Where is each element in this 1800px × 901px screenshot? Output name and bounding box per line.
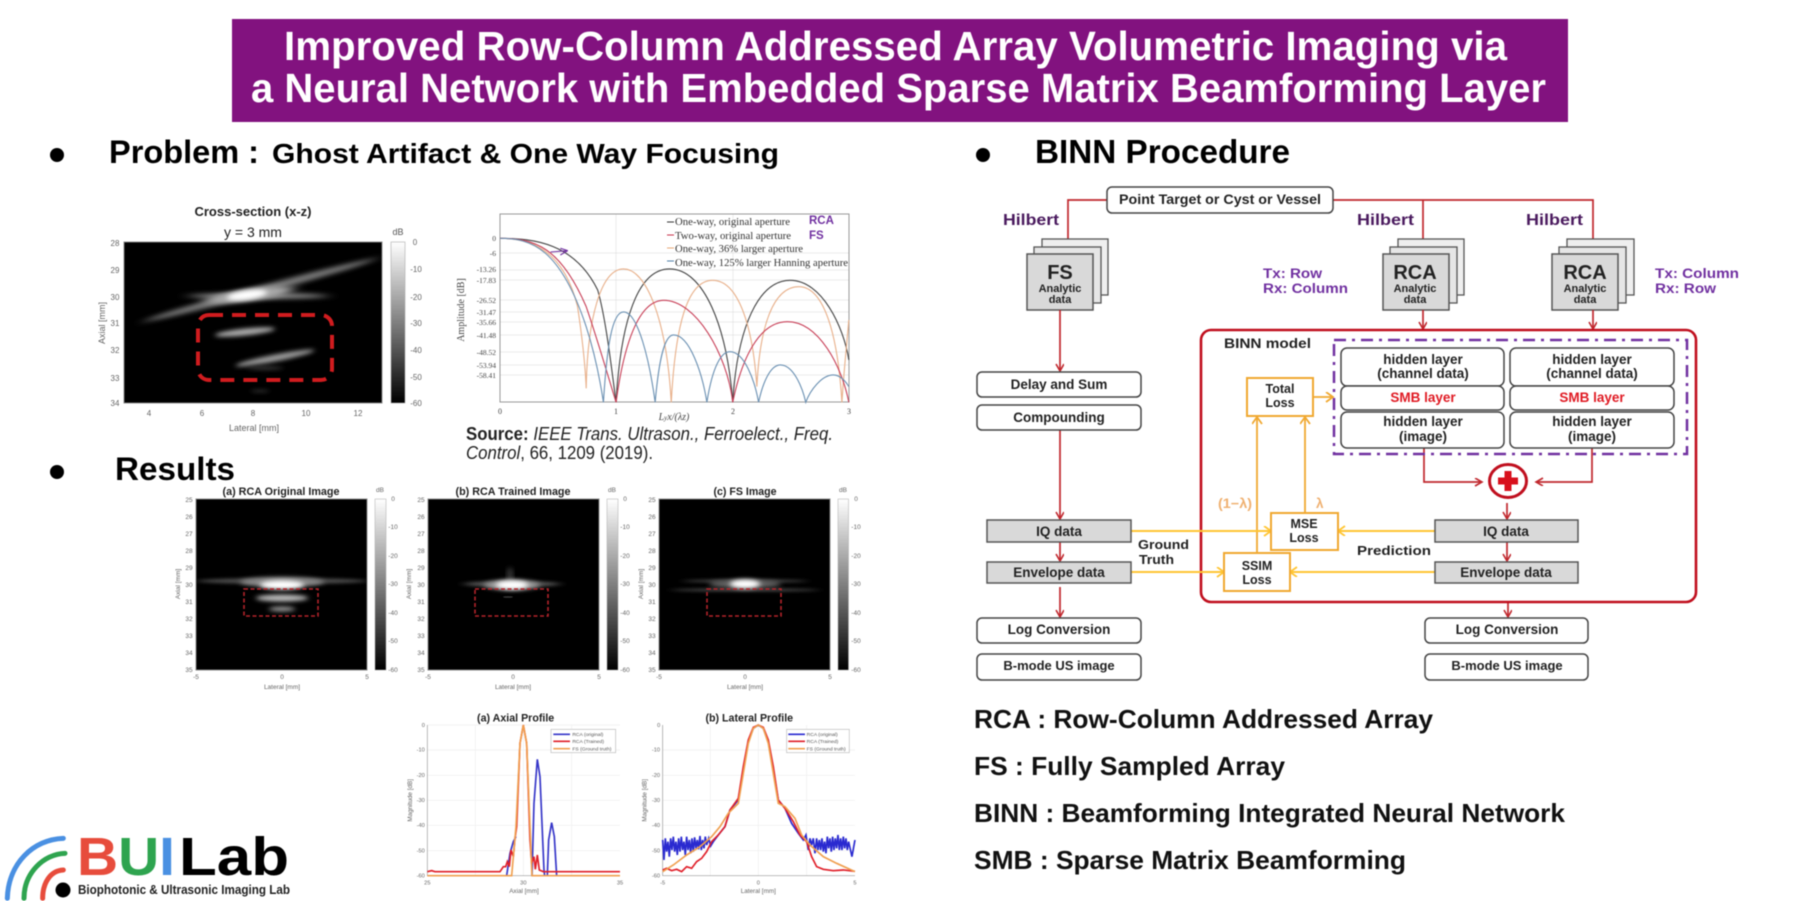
title banner: Improved Row-Column Addressed Array Volumetric Imaging via <box>284 23 1508 69</box>
flow: red connector arrows <box>1060 310 1593 617</box>
result image a: RCA original: 29 <box>185 565 193 572</box>
labels: Tx/Rx right: Tx: Column <box>1655 266 1739 281</box>
result image a: RCA original: dB <box>376 487 384 494</box>
amplitude plot: -6 <box>490 249 496 258</box>
heading: problem <box>50 134 779 170</box>
stack: RCA analytic data 1: data <box>1404 294 1427 306</box>
chart: axial profile: -50 <box>417 848 425 854</box>
heading: problem: Problem : <box>109 134 259 170</box>
labels: Tx/Rx right <box>1655 266 1739 296</box>
stack: FS analytic data: FS <box>1047 262 1073 284</box>
labels: Tx/Rx right: Rx: Row <box>1655 281 1717 296</box>
flow: RCA pipeline boxes: B-mode US image <box>1451 658 1563 673</box>
result image a: RCA original: Lateral [mm] <box>264 684 300 691</box>
result image b: RCA trained: 33 <box>417 633 425 640</box>
chart: lateral profile: -5 <box>660 881 665 887</box>
chart: lateral profile: -50 <box>652 848 660 854</box>
result image a: RCA original: 28 <box>185 548 193 555</box>
result image c: FS: 0 <box>743 674 747 681</box>
amplitude plot: -13.26 <box>477 265 496 274</box>
result image a: RCA original: 30 <box>185 582 193 589</box>
label: ground truth: Ground <box>1138 537 1189 552</box>
chart: lateral profile <box>642 712 857 895</box>
cross-section ultrasound image: 12 <box>354 409 363 418</box>
heading: BINN procedure: BINN Procedure <box>1035 133 1290 170</box>
heading: problem: Ghost Artifact & One Way Focusing <box>272 138 779 169</box>
amplitude plot: 0 <box>498 407 502 416</box>
stack: FS analytic data <box>1027 239 1108 310</box>
chart: axial profile: RCA (original) <box>572 732 604 738</box>
chart: axial profile: -30 <box>417 798 425 804</box>
cross-section ultrasound image: y = 3 mm <box>224 224 282 240</box>
cross-section ultrasound image <box>97 204 422 433</box>
labels: loss weights: λ <box>1316 496 1324 511</box>
result image a: RCA original: 26 <box>185 514 193 521</box>
amplitude plot: -53.94 <box>477 361 496 370</box>
result image a: RCA original: -60 <box>388 667 398 674</box>
box: SSIM loss: Loss <box>1242 573 1272 587</box>
result image c: FS: 32 <box>648 616 656 623</box>
result image a: RCA original: 27 <box>185 531 193 538</box>
cross-section ultrasound image: -40 <box>410 346 422 355</box>
flow: RCA pipeline boxes: IQ data <box>1483 524 1529 539</box>
amplitude plot: 0 <box>492 234 496 243</box>
chart: axial profile: 25 <box>424 881 430 887</box>
result image b: RCA trained: Lateral [mm] <box>495 684 531 691</box>
beamforming layers group: hidden layer <box>1552 352 1633 367</box>
result image b: RCA trained: -60 <box>620 667 630 674</box>
amplitude plot: -58.41 <box>477 371 496 380</box>
chart: axial profile: -60 <box>417 873 425 879</box>
beamforming layers group: SMB layer <box>1559 390 1625 405</box>
cross-section ultrasound image: 30 <box>111 293 120 302</box>
source citation <box>466 424 833 463</box>
amplitude plot: -17.83 <box>477 276 496 285</box>
cross-section ultrasound image: 29 <box>111 266 120 275</box>
chart: lateral profile: -40 <box>652 823 660 829</box>
chart: axial profile: -40 <box>417 823 425 829</box>
labels: Tx/Rx left: Tx: Row <box>1263 266 1323 281</box>
amplitude plot: 1 <box>614 407 618 416</box>
result image a: RCA original: -30 <box>388 581 398 588</box>
cross-section ultrasound image: 32 <box>111 346 120 355</box>
result image c: FS: dB <box>839 487 847 494</box>
chart: lateral profile: -60 <box>652 873 660 879</box>
result image c: FS: 30 <box>648 582 656 589</box>
result image a: RCA original: (a) RCA Original Image <box>222 486 340 498</box>
stack: FS analytic data: data <box>1049 294 1072 306</box>
box: total loss: Total <box>1266 382 1294 396</box>
chart: axial profile: -20 <box>417 773 425 779</box>
chart: axial profile: RCA (Trained) <box>572 739 604 745</box>
amplitude plot: Amplitude [dB] <box>456 278 467 342</box>
result image c: FS: 5 <box>828 674 832 681</box>
amplitude plot: -41.48 <box>477 331 496 340</box>
chart: axial profile: Axial [mm] <box>509 888 539 895</box>
result image c: FS: Lateral [mm] <box>727 684 763 691</box>
logo: BUILab: Lab <box>179 827 289 887</box>
result image b: RCA trained: dB <box>608 487 616 494</box>
flow: FS pipeline boxes: Log Conversion <box>1008 622 1110 637</box>
beamforming layers group: hidden layer <box>1552 414 1633 429</box>
result image b: RCA trained: 25 <box>417 497 425 504</box>
labels: Hilbert: Hilbert <box>1003 212 1059 229</box>
result image c: FS: 33 <box>648 633 656 640</box>
result image c: FS: 28 <box>648 548 656 555</box>
cross-section ultrasound image: Axial [mm] <box>97 302 107 344</box>
result image c: FS: Axial [mm] <box>638 569 645 599</box>
result image b: RCA trained: 31 <box>417 599 425 606</box>
stack: RCA analytic data 1: RCA <box>1393 262 1437 284</box>
glossary: SMB : Sparse Matrix Beamforming <box>974 845 1406 875</box>
chart: axial profile: (a) Axial Profile <box>477 712 554 724</box>
flow: RCA pipeline boxes <box>1425 520 1588 680</box>
label: prediction: Prediction <box>1357 543 1431 558</box>
beamforming layers group: hidden layer <box>1383 352 1464 367</box>
labels: loss weights <box>1218 496 1324 511</box>
amplitude plot: Two-way, original aperture <box>675 231 791 242</box>
labels: loss weights: (1−λ) <box>1218 496 1252 511</box>
result image a: RCA original: -40 <box>388 610 398 617</box>
result image c: FS <box>638 486 861 691</box>
result image c: FS: -60 <box>851 667 861 674</box>
flow: FS pipeline boxes: IQ data <box>1036 524 1082 539</box>
result image b: RCA trained: 0 <box>511 674 515 681</box>
stack: RCA analytic data 1 <box>1383 239 1464 310</box>
result image b: RCA trained: 28 <box>417 548 425 555</box>
beamforming layers group: SMB layer <box>1390 390 1456 405</box>
labels: Tx/Rx left: Rx: Column <box>1263 281 1348 296</box>
chart: axial profile: 0 <box>422 723 425 729</box>
chart: lateral profile: 5 <box>853 881 857 887</box>
flow: RCA pipeline boxes: Envelope data <box>1460 565 1552 580</box>
glossary: BINN : Beamforming Integrated Neural Network <box>974 798 1566 828</box>
cross-section ultrasound image: 31 <box>111 319 120 328</box>
chart: lateral profile: 0 <box>757 881 760 887</box>
box: MSE loss <box>1271 513 1338 550</box>
flow: FS pipeline boxes: Delay and Sum <box>1011 377 1107 392</box>
amplitude plot: -48.52 <box>477 348 496 357</box>
result image b: RCA trained: 0 <box>623 496 627 503</box>
result image c: FS: -10 <box>851 524 861 531</box>
cross-section ultrasound image: 8 <box>251 409 256 418</box>
amplitude plot: -26.52 <box>477 296 496 305</box>
chart: lateral profile: Lateral [mm] <box>741 888 776 895</box>
result image b: RCA trained: 34 <box>417 650 425 657</box>
cross-section ultrasound image: 4 <box>147 409 152 418</box>
result image a: RCA original: 31 <box>185 599 193 606</box>
flow: FS pipeline boxes: Compounding <box>1013 410 1105 425</box>
result image a: RCA original: 34 <box>185 650 193 657</box>
beamforming layers group: (channel data) <box>1377 366 1469 381</box>
stack: RCA analytic data 2: data <box>1574 294 1597 306</box>
result image c: FS: (c) FS Image <box>714 486 776 498</box>
chart: axial profile: FS (Ground truth) <box>572 746 612 752</box>
result image a: RCA original: 32 <box>185 616 193 623</box>
box: total loss: Loss <box>1265 396 1295 410</box>
result image a: RCA original: 25 <box>185 497 193 504</box>
chart: lateral profile: -20 <box>652 773 660 779</box>
amplitude plot <box>456 214 851 423</box>
panel: BINN model <box>1201 330 1696 602</box>
amplitude plot: RCA <box>809 215 834 227</box>
result image c: FS: -50 <box>851 638 861 645</box>
amplitude plot: 2 <box>731 407 735 416</box>
box: SSIM loss <box>1224 553 1290 591</box>
flow: source connectors <box>1068 200 1593 246</box>
result image b: RCA trained: 27 <box>417 531 425 538</box>
beamforming layers group <box>1334 340 1687 454</box>
result image b: RCA trained: -50 <box>620 638 630 645</box>
cross-section ultrasound image: 6 <box>200 409 205 418</box>
result image a: RCA original: 0 <box>280 674 284 681</box>
logo: BUILab: Biophotonic & Ultrasonic Imaging Lab <box>78 883 290 897</box>
amplitude plot: -35.66 <box>477 318 496 327</box>
result image b: RCA trained: 35 <box>417 667 425 674</box>
box: MSE loss: Loss <box>1289 531 1319 545</box>
result image a: RCA original: -10 <box>388 524 398 531</box>
cross-section ultrasound image: 28 <box>111 239 120 248</box>
logo: BUILab: BUI <box>77 827 175 887</box>
label: ground truth: Truth <box>1139 552 1174 567</box>
result image a: RCA original: -50 <box>388 638 398 645</box>
chart: axial profile: Magnitude [dB] <box>407 779 414 822</box>
cross-section ultrasound image: -30 <box>410 319 422 328</box>
result image c: FS: 35 <box>648 667 656 674</box>
flow: yellow data connectors <box>1131 531 1435 572</box>
result image b: RCA trained: 26 <box>417 514 425 521</box>
box: SSIM loss: SSIM <box>1242 559 1272 573</box>
source citation: Source: IEEE Trans. Ultrason., Ferroelect., Freq. <box>466 424 833 444</box>
cross-section ultrasound image: 0 <box>413 238 418 247</box>
chart: lateral profile: RCA (Trained) <box>807 739 839 745</box>
beamforming layers group: (image) <box>1399 429 1447 444</box>
result image b: RCA trained: -5 <box>425 674 431 681</box>
result image b: RCA trained: -20 <box>620 553 630 560</box>
box: total loss <box>1247 378 1313 416</box>
title banner: a Neural Network with Embedded Sparse Matrix Beamforming Layer <box>251 65 1546 111</box>
result image a: RCA original: -5 <box>193 674 199 681</box>
flow: RCA pipeline boxes: Log Conversion <box>1456 622 1558 637</box>
chart: lateral profile: 0 <box>657 723 660 729</box>
beamforming layers group: (image) <box>1568 429 1616 444</box>
stack: FS analytic data: Analytic <box>1039 283 1081 295</box>
result image a: RCA original <box>175 486 398 691</box>
cross-section ultrasound image: 10 <box>302 409 311 418</box>
result image c: FS: 26 <box>648 514 656 521</box>
stack: RCA analytic data 2 <box>1552 239 1634 310</box>
cross-section ultrasound image: -10 <box>410 265 422 274</box>
flow: FS pipeline boxes: Envelope data <box>1013 565 1105 580</box>
result image c: FS: 27 <box>648 531 656 538</box>
cross-section ultrasound image: -50 <box>410 373 422 382</box>
amplitude plot: FS <box>809 230 824 242</box>
title banner <box>232 19 1568 122</box>
glossary: RCA : Row-Column Addressed Array <box>974 704 1434 734</box>
cross-section ultrasound image: dB <box>392 227 404 237</box>
flow: FS pipeline boxes <box>977 372 1141 680</box>
result image b: RCA trained: 30 <box>417 582 425 589</box>
result image c: FS: 31 <box>648 599 656 606</box>
result image b: RCA trained: 29 <box>417 565 425 572</box>
result image b: RCA trained <box>406 486 630 691</box>
result image a: RCA original: 35 <box>185 667 193 674</box>
chart: axial profile <box>407 712 623 895</box>
result image c: FS: 25 <box>648 497 656 504</box>
chart: axial profile: 30 <box>520 881 526 887</box>
cross-section ultrasound image: Lateral [mm] <box>229 423 279 433</box>
cross-section ultrasound image: -60 <box>410 399 422 408</box>
result image b: RCA trained: 32 <box>417 616 425 623</box>
result image a: RCA original: 0 <box>391 496 395 503</box>
chart: lateral profile: -30 <box>652 798 660 804</box>
flow: FS pipeline boxes: B-mode US image <box>1003 658 1115 673</box>
logo: BUILab <box>7 827 290 898</box>
result image c: FS: 34 <box>648 650 656 657</box>
labels: Hilbert <box>1003 212 1583 229</box>
cross-section ultrasound image: 34 <box>111 399 120 408</box>
result image b: RCA trained: -10 <box>620 524 630 531</box>
result image c: FS: -40 <box>851 610 861 617</box>
labels: Hilbert: Hilbert <box>1357 212 1414 229</box>
result image a: RCA original: -20 <box>388 553 398 560</box>
chart: lateral profile: FS (Ground truth) <box>807 746 846 752</box>
result image b: RCA trained: -40 <box>620 610 630 617</box>
beamforming layers group: (channel data) <box>1546 366 1638 381</box>
chart: lateral profile: Magnitude [dB] <box>642 779 649 822</box>
result image c: FS: -5 <box>656 674 662 681</box>
amplitude plot: One-way, 36% larger aperture <box>675 244 803 255</box>
flow: source box <box>1107 187 1333 213</box>
beamforming layers group: hidden layer <box>1383 414 1464 429</box>
result image c: FS: -20 <box>851 553 861 560</box>
amplitude plot: 3 <box>847 407 851 416</box>
cross-section ultrasound image: -20 <box>410 293 422 302</box>
result image a: RCA original: Axial [mm] <box>175 569 182 599</box>
flow: source box: Point Target or Cyst or Vessel <box>1119 192 1321 207</box>
heading: results <box>50 451 235 487</box>
chart: axial profile: 35 <box>617 881 623 887</box>
heading: results: Results <box>115 451 235 487</box>
cross-section ultrasound image: Cross-section (x-z) <box>194 204 312 219</box>
stack: RCA analytic data 2: RCA <box>1563 262 1607 284</box>
labels: Hilbert: Hilbert <box>1526 212 1583 229</box>
chart: lateral profile: -10 <box>652 748 660 754</box>
chart: lateral profile: RCA (original) <box>807 732 838 738</box>
result image b: RCA trained: 5 <box>597 674 601 681</box>
source citation: Control, 66, 1209 (2019). <box>466 443 653 463</box>
cross-section ultrasound image: 33 <box>111 374 120 383</box>
flow: orange loss connectors <box>1257 397 1333 553</box>
result image b: RCA trained: (b) RCA Trained Image <box>456 486 570 498</box>
amplitude plot: -31.47 <box>477 308 496 317</box>
result image a: RCA original: 5 <box>365 674 369 681</box>
box: MSE loss: MSE <box>1290 517 1318 531</box>
result image c: FS: -30 <box>851 581 861 588</box>
amplitude plot: One-way, 125% larger Hanning aperture <box>675 258 848 269</box>
result image c: FS: 0 <box>854 496 858 503</box>
stack: RCA analytic data 1: Analytic <box>1394 283 1436 295</box>
icon: plus circle <box>1490 464 1526 498</box>
result image c: FS: 29 <box>648 565 656 572</box>
chart: lateral profile: (b) Lateral Profile <box>705 712 793 724</box>
label: BINN model: BINN model <box>1224 336 1311 351</box>
result image b: RCA trained: Axial [mm] <box>406 569 413 599</box>
glossary: FS : Fully Sampled Array <box>974 751 1286 781</box>
labels: Tx/Rx left <box>1263 266 1348 296</box>
result image b: RCA trained: -30 <box>620 581 630 588</box>
glossary <box>974 704 1566 875</box>
result image a: RCA original: 33 <box>185 633 193 640</box>
amplitude plot: Lyx/(λz) <box>658 412 690 423</box>
stack: RCA analytic data 2: Analytic <box>1564 283 1606 295</box>
amplitude plot: One-way, original aperture <box>675 217 790 228</box>
label: ground truth <box>1138 537 1189 567</box>
chart: axial profile: -10 <box>417 748 425 754</box>
